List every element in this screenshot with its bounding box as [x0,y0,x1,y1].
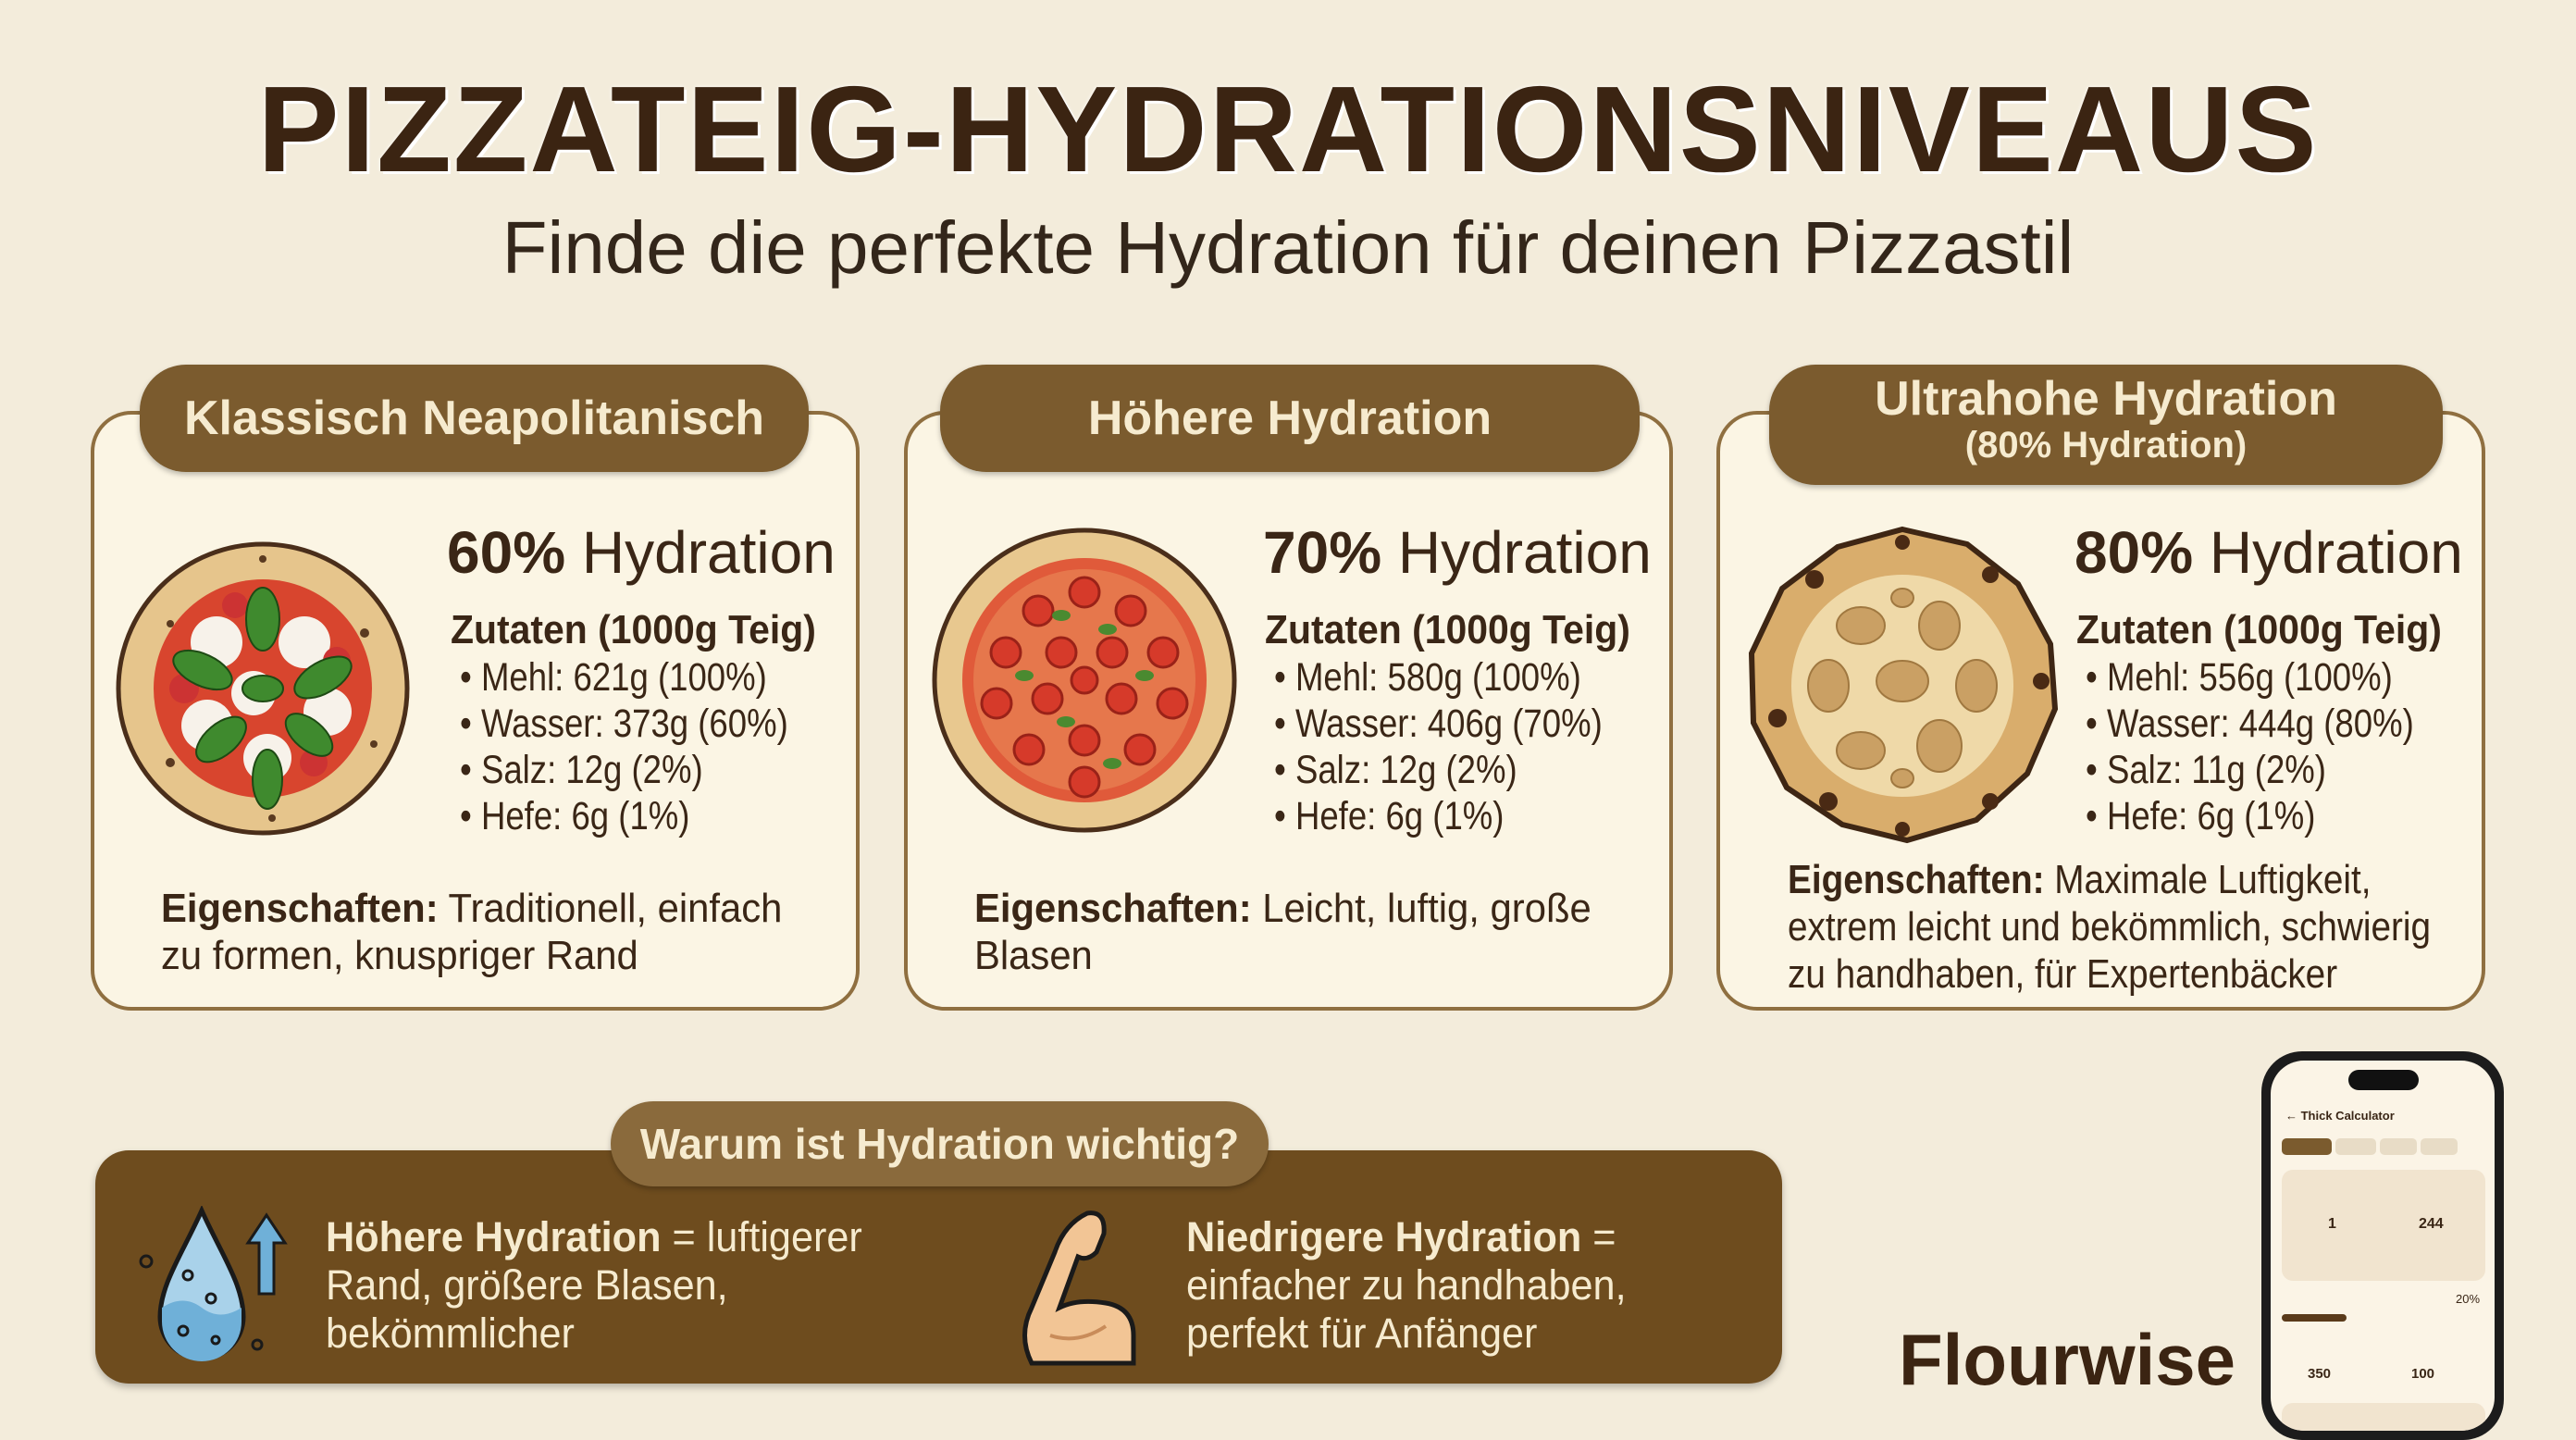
phone mockup: 20% [2456,1292,2480,1306]
ingredients list: Salz: 11g (2%) [2107,748,2326,792]
phone mockup: 1 [2328,1216,2336,1232]
tab: Warum ist Hydration wichtig? [611,1101,1269,1186]
properties: Eigenschaften: Traditionell, einfach [161,886,782,931]
tab: Ultrahohe Hydration: (80% Hydration) [1965,425,2247,466]
tab: Klassisch Neapolitanisch [140,365,809,472]
properties [974,886,1591,978]
heading: 80% hydration: 80% Hydration [2074,519,2463,586]
ingredients list: Mehl: 621g (100%) [481,655,767,700]
properties: Eigenschaften: Maximale Luftigkeit, [1788,857,2371,902]
phone mockup [2261,1051,2504,1440]
ingredients list: Salz: 12g (2%) [481,748,703,792]
title: PIZZATEIG-HYDRATIONSNIVEAUS [257,61,2319,197]
ingredients list [461,655,788,838]
ingredients heading: Zutaten (1000g Teig) [451,607,816,652]
pizza: margherita [117,542,409,835]
tab: Ultrahohe Hydration: Ultrahohe Hydration [1875,372,2337,426]
tab: Ultrahohe Hydration [1769,365,2443,485]
tab: Warum ist Hydration wichtig?: Warum ist Hydration wichtig? [640,1120,1239,1168]
properties [161,886,782,978]
brand: Flourwise: Flourwise [1899,1319,2235,1400]
ingredients list: Mehl: 556g (100%) [2107,655,2393,700]
ingredients heading: Zutaten (1000g Teig) [2076,607,2442,652]
pizza: pepperoni [933,528,1236,833]
panel: ultra high hydration [1716,411,2485,1011]
text: higher hydration: Höhere Hydration = luftigerer Rand, größere Blasen, bekömmlicher [326,1213,862,1357]
ingredients heading: Zutaten (1000g Teig) [1265,607,1630,652]
subtitle: Finde die perfekte Hydration für deinen Pizzastil [502,206,2074,289]
ingredients list [2087,655,2414,838]
ingredients list: Wasser: 444g (80%) [2107,701,2414,746]
phone mockup: 244 [2419,1216,2444,1232]
phone mockup: ← Thick Calculator [2285,1109,2395,1123]
tab: Höhere Hydration: Höhere Hydration [1088,391,1492,445]
text: lower hydration: Niedrigere Hydration = einfacher zu handhaben, perfekt für Anfänger [1186,1213,1627,1357]
ingredients list: Hefe: 6g (1%) [1295,794,1504,838]
properties: zu handhaben, für Expertenbäcker [1788,951,2337,997]
panel: classic neapolitan [91,411,860,1011]
heading: 60% hydration: 60% Hydration [447,519,836,586]
icon: water drop with arrow [139,1206,288,1361]
properties: Blasen [974,933,1093,978]
ingredients list: Mehl: 580g (100%) [1295,655,1581,700]
tab: Klassisch Neapolitanisch: Klassisch Neapolitanisch [184,391,764,445]
ingredients list: Wasser: 406g (70%) [1295,701,1603,746]
properties: Eigenschaften: Leicht, luftig, große [974,886,1591,931]
ingredients list: Hefe: 6g (1%) [2107,794,2315,838]
ingredients list: Wasser: 373g (60%) [481,701,788,746]
phone mockup: 100 [2411,1366,2434,1382]
ingredients list: Salz: 12g (2%) [1295,748,1517,792]
tab: Höhere Hydration [940,365,1640,472]
properties: zu formen, knuspriger Rand [161,933,638,978]
panel: higher hydration [904,411,1673,1011]
panel: why hydration matters [95,1150,1782,1384]
ingredients list: Hefe: 6g (1%) [481,794,689,838]
properties [1788,857,2431,997]
properties: extrem leicht und bekömmlich, schwierig [1788,904,2431,950]
heading: 70% hydration: 70% Hydration [1263,519,1652,586]
ingredients list [1275,655,1603,838]
icon: muscle arm [1022,1210,1136,1366]
phone mockup: 350 [2308,1366,2331,1382]
pizza: airy dough [1749,526,2058,844]
